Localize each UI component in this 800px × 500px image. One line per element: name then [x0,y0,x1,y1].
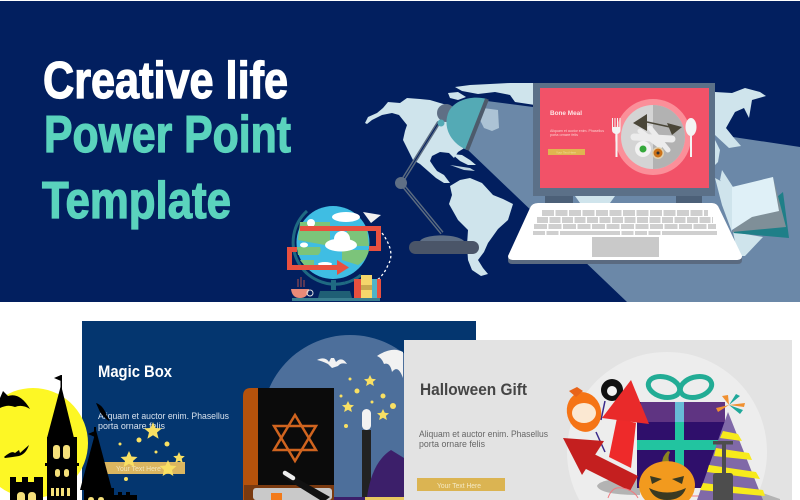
laptop screen: Aliquam et auctor enim. Phasellus [550,129,604,133]
panel: magic box [82,321,476,500]
red arrow [290,228,378,268]
heading: halloween gift: Halloween Gift [420,381,527,399]
stack of books [354,275,381,298]
light beam [468,101,800,302]
globe illustration [290,206,391,301]
panel: castle silhouette [0,375,137,500]
light circle [567,352,767,500]
plate [615,99,691,175]
party hat [697,394,765,500]
body text: halloween gift [419,429,548,450]
coffee cup [291,277,313,298]
body text: magic box: Aliquam et auctor enim. Phasellus [98,411,229,422]
body text: halloween gift: porta ornare felis [419,439,485,450]
star of david [274,415,316,461]
wizard hat [334,450,404,500]
small wand [283,472,330,500]
yellow moon [0,388,88,498]
fork and spoon [612,118,696,157]
pumpkin [608,451,700,500]
pinwheel [716,394,745,414]
body text: magic box: porta ornare felis [98,421,165,432]
body text: magic box [98,411,229,432]
small tower [80,430,112,490]
button: magic box: Your Text Here [116,464,161,473]
shadows [597,478,780,500]
button: halloween gift: Your Text Here [437,481,481,490]
pump [713,441,733,500]
firework rocket up [602,380,649,468]
stars [118,375,396,481]
map over beam [480,88,766,256]
trackpad [592,237,659,257]
banner panel [0,1,800,302]
globe stand [331,280,336,290]
spell book [243,388,334,500]
balloon pumpkin [562,387,606,452]
tall tower [10,375,137,500]
balloon skull [601,379,623,420]
body text: halloween gift: Aliquam et auctor enim. Phasellus [419,429,548,440]
button: magic box [102,462,185,474]
title [42,52,291,230]
bats in silhouette [0,391,109,458]
book [732,177,789,238]
desk lamp [395,98,487,254]
moon circle [262,335,438,500]
panel: halloween gift [404,340,792,500]
title: Power Point [44,106,291,164]
title: Template [42,172,231,230]
laptop screen: Bone Meal [550,111,582,117]
gift box [637,373,725,488]
laptop [508,83,742,264]
laptop screen [540,88,709,188]
laptop screen: porta ornare felis [550,133,578,137]
bats [317,350,403,378]
castle wall [10,477,43,500]
title: Creative life [43,52,288,110]
magic wand [362,409,371,500]
keyboard [533,213,717,233]
world map [365,83,535,276]
button: halloween gift [417,478,505,491]
heading: magic box: Magic Box [98,362,172,381]
firework rocket diagonal [563,438,638,491]
paper plane [363,212,381,223]
laptop screen: Your Text Here [556,150,576,154]
tower windows [17,445,104,500]
ribbon bow [646,373,714,401]
dotted path [376,233,391,281]
